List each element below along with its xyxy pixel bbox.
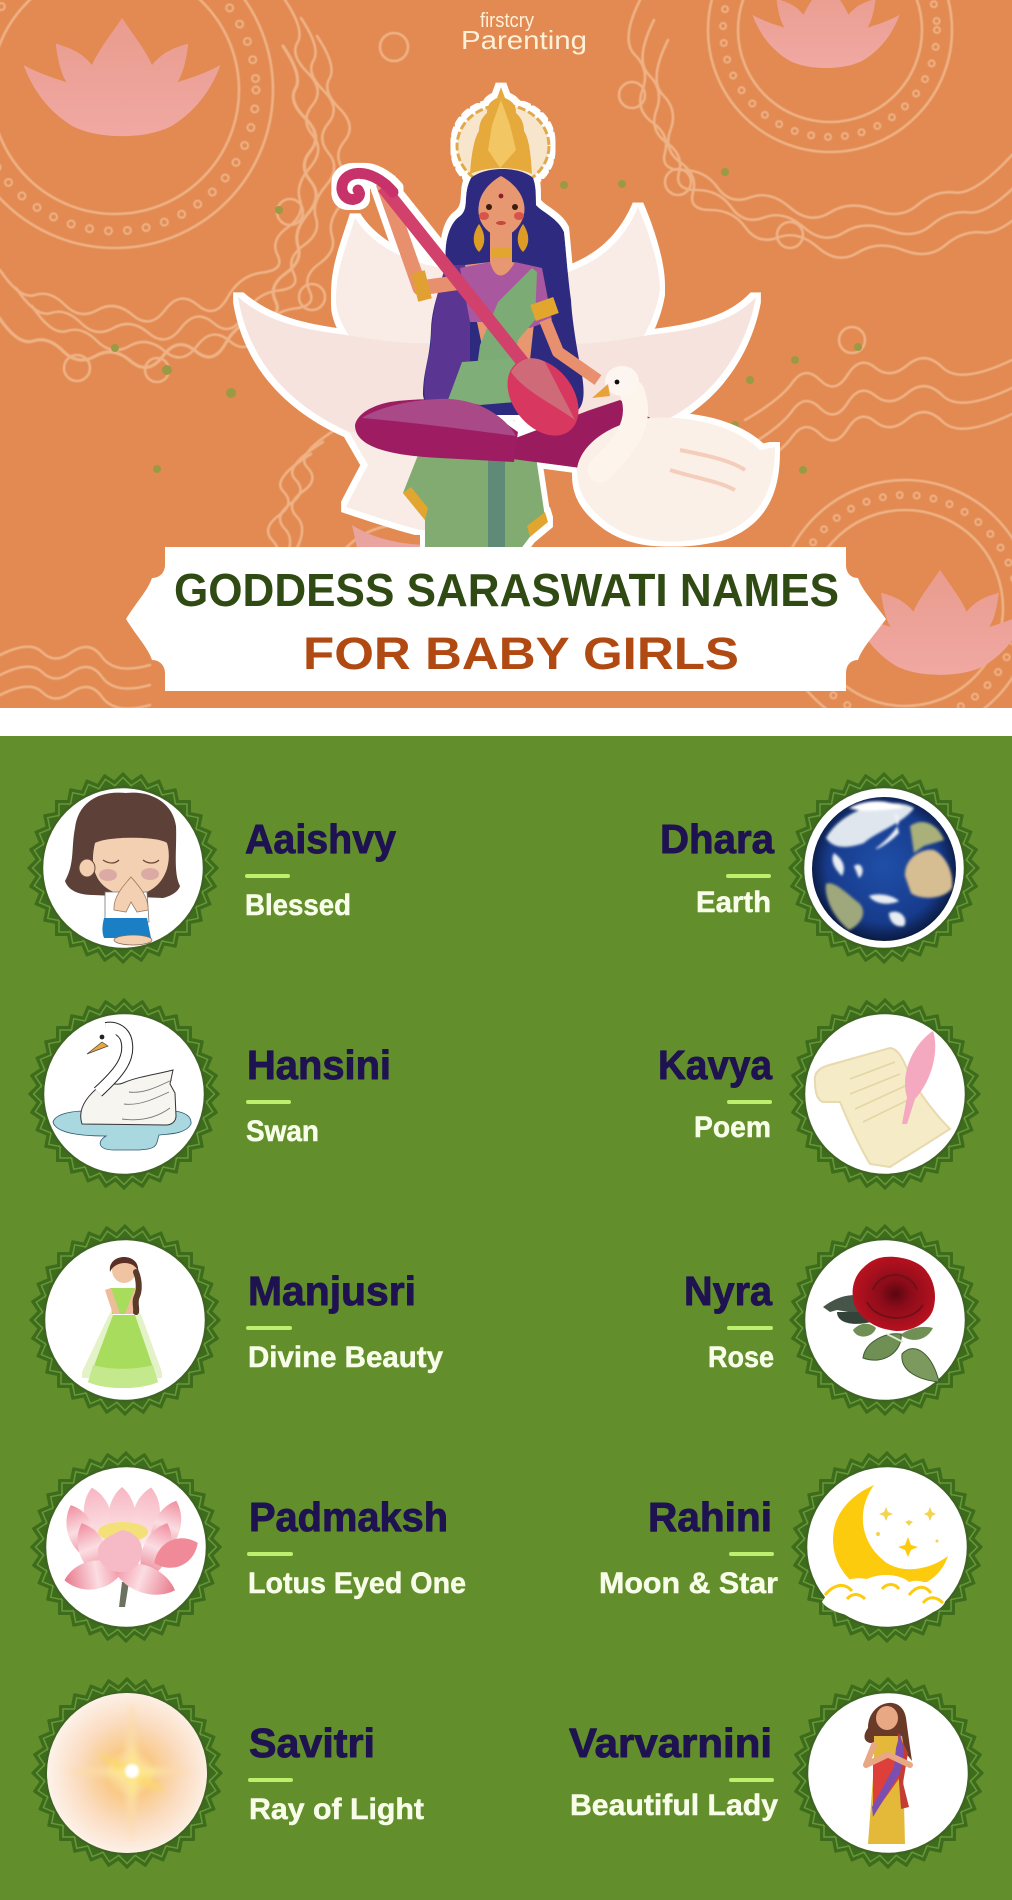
right arm — [545, 320, 598, 380]
rule — [727, 1326, 773, 1330]
background mandala pattern — [0, 0, 1012, 736]
crown — [470, 87, 532, 174]
meaning: Ray of Light — [249, 1793, 424, 1826]
meaning: Rose — [708, 1341, 774, 1374]
rule — [245, 874, 290, 878]
swan — [577, 366, 775, 542]
rule — [727, 1100, 772, 1104]
veena — [342, 173, 593, 449]
lap — [505, 400, 662, 468]
medallion: earth — [789, 773, 979, 963]
meaning: Blessed — [245, 889, 351, 922]
logo: FirstCry Parenting: Parenting — [461, 25, 587, 55]
name: Dhara — [660, 816, 775, 862]
medallion: pink lotus flower — [31, 1452, 221, 1642]
medallion: scroll and feather — [790, 999, 980, 1189]
name: Hansini — [247, 1042, 391, 1088]
meaning: Earth — [696, 886, 771, 919]
lotus: pink petal peeking behind figure — [352, 525, 430, 552]
meaning: Lotus Eyed One — [248, 1567, 466, 1600]
title line 2: FOR BABY GIRLS — [303, 628, 739, 679]
name: Aaishvy — [245, 816, 396, 862]
name: Varvarnini — [569, 1720, 772, 1766]
gold armband — [533, 305, 556, 313]
rule — [246, 1100, 291, 1104]
lotus petals — [238, 207, 756, 530]
name card: Kavya — [658, 999, 980, 1189]
lotus: top right — [752, 0, 900, 68]
name: Nyra — [684, 1268, 773, 1314]
name card: Aaishvy — [28, 773, 396, 963]
rule — [729, 1552, 774, 1556]
meaning: Swan — [246, 1115, 319, 1148]
neck and torso — [465, 232, 540, 360]
rule — [729, 1778, 774, 1782]
panel: orange header background — [0, 0, 1012, 708]
title line 1: GODDESS SARASWATI NAMES — [174, 564, 839, 616]
face — [478, 176, 525, 236]
title banner — [126, 547, 886, 691]
lotus: top left — [24, 18, 220, 136]
hair — [423, 169, 584, 416]
medallion: swan — [29, 999, 219, 1189]
name card: Hansini — [29, 999, 391, 1189]
name card: Manjusri — [30, 1225, 443, 1415]
rule — [246, 1326, 292, 1330]
logo: FirstCry Parenting: firstcry — [480, 10, 534, 32]
medallion: ray of light — [32, 1678, 222, 1868]
meaning: Divine Beauty — [248, 1341, 443, 1374]
meaning: Moon & Star — [599, 1567, 778, 1600]
raised arm — [383, 183, 462, 288]
panel: green names background — [0, 736, 1012, 1900]
meaning: Beautiful Lady — [570, 1789, 778, 1822]
rule — [248, 1778, 293, 1782]
rule — [247, 1552, 293, 1556]
blouse — [460, 262, 552, 328]
lower skirt — [403, 450, 545, 550]
meaning: Poem — [694, 1111, 771, 1144]
name: Manjusri — [248, 1268, 416, 1314]
medallion: girl in green lehenga — [30, 1225, 220, 1415]
name card: Varvarnini — [569, 1678, 983, 1868]
sari sash — [474, 268, 537, 388]
halo — [457, 105, 549, 187]
name: Rahini — [648, 1494, 772, 1540]
logo: FirstCry Parenting — [461, 10, 587, 55]
lotus: bottom right — [853, 570, 1012, 675]
rule — [726, 874, 771, 878]
name: Padmaksh — [249, 1494, 448, 1540]
name card: Padmaksh — [31, 1452, 466, 1642]
name card: Rahini — [599, 1452, 982, 1642]
name: Savitri — [249, 1720, 375, 1766]
medallion: lady in saree — [793, 1678, 983, 1868]
necklace — [492, 247, 511, 258]
medallion: praying girl — [28, 773, 218, 963]
name: Kavya — [658, 1042, 773, 1088]
name card: Dhara — [660, 773, 979, 963]
medallion: crescent moon and stars — [792, 1452, 982, 1642]
earrings — [474, 224, 528, 252]
illustration: Goddess Saraswati on lotus with veena and swan — [238, 87, 775, 550]
name card: Savitri — [32, 1678, 424, 1868]
medallion: red rose — [790, 1225, 980, 1415]
green speckles — [111, 168, 862, 474]
name card: Nyra — [684, 1225, 980, 1415]
